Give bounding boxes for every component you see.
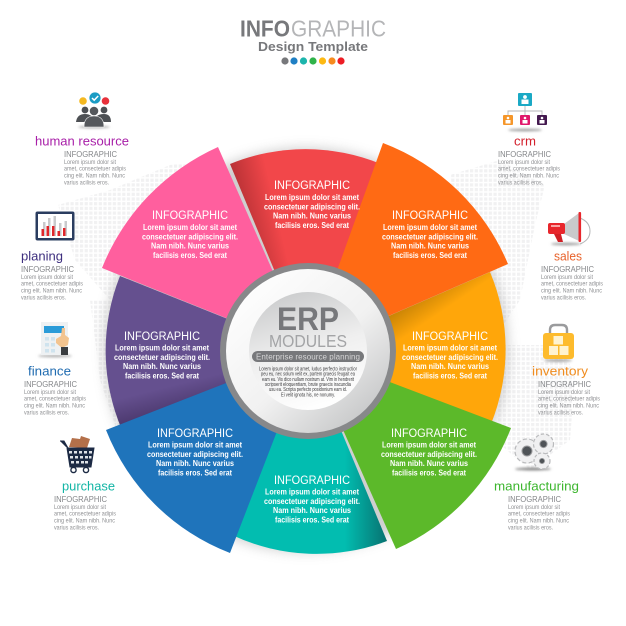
text block: sales: cing elit. Nam nibh. Nunc [541, 288, 603, 294]
purple slice text: Nam nibh. Nunc varius [123, 361, 201, 371]
label: crm: crm [514, 134, 536, 148]
red slice text: consectetuer adipiscing elit. [264, 202, 360, 212]
hub title ERP: ERP [277, 301, 339, 337]
yellow slice text: INFOGRAPHIC [412, 331, 488, 343]
text block: inventory: cing elit. Nam nibh. Nunc [538, 402, 600, 410]
panel: yellow slice [308, 272, 506, 424]
text block: crm: cing elit. Nam nibh. Nunc [498, 172, 560, 180]
orange slice text [382, 210, 478, 260]
pink slice text: Lorem ipsum dolor sit amet [143, 222, 237, 232]
teal slice text: facilisis eros. Sed erat [275, 514, 349, 524]
label: human resource: human resource [35, 134, 129, 148]
text block: planing: amet, consectetuer adipis [21, 280, 84, 288]
icon: planning tablet chart [36, 212, 74, 240]
green slice text: Lorem ipsum dolor sit amet [382, 440, 476, 450]
text block: purchase: amet, consectetuer adipis [54, 510, 117, 518]
blue slice text: Lorem ipsum dolor sit amet [148, 440, 242, 450]
text block: human resource: varius acilisis eros. [64, 180, 109, 186]
text block: crm: varius acilisis eros. [498, 180, 543, 186]
orange slice text: INFOGRAPHIC [392, 210, 468, 222]
hub subtitle MODULES: MODULES [269, 331, 347, 351]
orange slice text: facilisis eros. Sed erat [393, 250, 467, 260]
label: finance: finance [28, 364, 71, 378]
panel: red slice [230, 149, 381, 351]
center hub [220, 263, 396, 439]
text block: finance [24, 379, 87, 416]
blue slice text: consectetuer adipiscing elit. [147, 449, 243, 459]
teal slice text: Nam nibh. Nunc varius [273, 505, 351, 515]
text block: manufacturing: Lorem ipsum dolor sit [508, 504, 560, 511]
red slice text: INFOGRAPHIC [274, 180, 350, 192]
text block: purchase [54, 494, 117, 532]
red slice text: Nam nibh. Nunc varius [273, 210, 351, 220]
panel: purple slice [106, 276, 308, 430]
text block: purchase: INFOGRAPHIC [54, 494, 107, 504]
text block: planing: INFOGRAPHIC [21, 264, 74, 274]
teal slice text: consectetuer adipiscing elit. [264, 496, 360, 506]
orange slice text: Nam nibh. Nunc varius [391, 240, 469, 250]
text block: planing: varius acilisis eros. [21, 294, 66, 302]
text block: inventory: Lorem ipsum dolor sit [538, 389, 590, 396]
hub pill: enterprise resource planning: Enterprise resource planning [256, 352, 360, 362]
title: GRAPHIC [291, 16, 386, 42]
text block: finance: varius acilisis eros. [24, 410, 69, 416]
text block: inventory [538, 379, 601, 416]
yellow slice text: Lorem ipsum dolor sit amet [403, 342, 497, 352]
text block: crm: amet, consectetuer adipis [498, 166, 561, 172]
text block: finance: amet, consectetuer adipis [24, 396, 87, 402]
hub description text: peu eu, nec solum velit ex, partem graecis feugait ea [261, 372, 355, 378]
background dotted world map [58, 160, 575, 470]
text block: sales: INFOGRAPHIC [541, 264, 594, 274]
text block: crm [498, 149, 561, 186]
text block: planing [21, 264, 84, 302]
text block: manufacturing [508, 494, 571, 532]
hub description text [259, 366, 357, 398]
text block: manufacturing: varius acilisis eros. [508, 524, 553, 532]
red slice text [264, 180, 360, 230]
purple slice text: facilisis eros. Sed erat [125, 370, 199, 380]
text block: finance: cing elit. Nam nibh. Nunc [24, 402, 86, 410]
text block: manufacturing: cing elit. Nam nibh. Nunc [508, 518, 570, 524]
yellow slice text: Nam nibh. Nunc varius [411, 361, 489, 371]
subtitle: Design Template [258, 39, 368, 54]
icon: manufacturing gears [515, 434, 554, 470]
label: manufacturing: manufacturing [494, 478, 579, 494]
text block: planing: cing elit. Nam nibh. Nunc [21, 288, 83, 294]
text block: inventory: varius acilisis eros. [538, 410, 583, 416]
text block: sales: Lorem ipsum dolor sit [541, 274, 593, 281]
hub description text: eam eu. Vis dico nullam nostrum at. Vim in hendrerit [262, 377, 354, 383]
blue slice text: facilisis eros. Sed erat [158, 468, 232, 478]
blue slice text: INFOGRAPHIC [157, 428, 233, 440]
icon: finance calculator [38, 322, 72, 357]
label: sales: sales [554, 248, 582, 264]
text block: inventory: amet, consectetuer adipis [538, 396, 601, 402]
purple slice text: consectetuer adipiscing elit. [114, 352, 210, 362]
pink slice text: INFOGRAPHIC [152, 210, 228, 222]
teal slice text: INFOGRAPHIC [274, 475, 350, 487]
purple slice text: INFOGRAPHIC [124, 331, 200, 343]
orange slice text: Lorem ipsum dolor sit amet [383, 222, 477, 232]
purple slice text: Lorem ipsum dolor sit amet [115, 342, 209, 352]
text block: crm: INFOGRAPHIC [498, 149, 551, 159]
pink slice text: consectetuer adipiscing elit. [142, 232, 238, 242]
pink slice text: facilisis eros. Sed erat [153, 250, 227, 260]
hub description text: Ei velit ignota his, ne nonumy. [281, 392, 335, 398]
yellow slice text [402, 331, 498, 380]
hub description text: Lorem ipsum dolor sit amet, ludus perfecto instructior [259, 366, 357, 372]
text block: finance: INFOGRAPHIC [24, 379, 77, 389]
yellow slice text: consectetuer adipiscing elit. [402, 352, 498, 362]
text block: human resource: Lorem ipsum dolor sit [64, 159, 116, 166]
icon: human resource team [76, 92, 111, 128]
text block: inventory: INFOGRAPHIC [538, 379, 591, 389]
title [240, 16, 386, 65]
teal slice text: Lorem ipsum dolor sit amet [265, 486, 359, 496]
purple slice text [114, 331, 210, 380]
title: INFO [240, 16, 290, 42]
pink slice text: Nam nibh. Nunc varius [151, 240, 229, 250]
text block: purchase: cing elit. Nam nibh. Nunc [54, 518, 116, 524]
icon: crm org chart [503, 93, 547, 131]
green slice text: Nam nibh. Nunc varius [390, 458, 468, 468]
pink slice text [142, 210, 238, 260]
text block: human resource: amet, consectetuer adipis [64, 166, 127, 172]
label: inventory: inventory [532, 364, 589, 378]
text block: finance: Lorem ipsum dolor sit [24, 389, 76, 396]
icon: inventory bag [543, 325, 574, 362]
teal slice text [264, 475, 360, 524]
green slice text [381, 428, 477, 478]
green slice text: facilisis eros. Sed erat [392, 468, 466, 478]
label: planing: planing [21, 248, 63, 264]
green slice text: INFOGRAPHIC [391, 428, 467, 440]
icon: sales megaphone [548, 212, 590, 245]
panel: blue slice [106, 351, 308, 553]
text block: purchase: Lorem ipsum dolor sit [54, 504, 106, 511]
text block: human resource [64, 149, 127, 186]
hub description text: usu ea. Scripta perfecto posidonium eam id. [269, 387, 347, 393]
panel: pink slice [102, 147, 308, 351]
text block: sales: varius acilisis eros. [541, 294, 586, 302]
text block: purchase: varius acilisis eros. [54, 524, 99, 532]
text block: manufacturing: amet, consectetuer adipis [508, 510, 571, 518]
red slice text: facilisis eros. Sed erat [275, 220, 349, 230]
text block: sales [541, 264, 604, 302]
text block: manufacturing: INFOGRAPHIC [508, 494, 561, 504]
text block: human resource: INFOGRAPHIC [64, 149, 117, 159]
text block: sales: amet, consectetuer adipis [541, 280, 604, 288]
text block: crm: Lorem ipsum dolor sit [498, 159, 550, 166]
orange slice text: consectetuer adipiscing elit. [382, 232, 478, 242]
panel: orange slice [308, 143, 508, 351]
icon: purchase shopping cart [60, 436, 94, 473]
red slice text: Lorem ipsum dolor sit amet [265, 192, 359, 202]
label: purchase: purchase [62, 478, 115, 494]
panel: teal slice [232, 351, 387, 554]
blue slice text [147, 428, 243, 478]
text block: planing: Lorem ipsum dolor sit [21, 274, 73, 281]
text block: human resource: cing elit. Nam nibh. Nunc [64, 172, 126, 180]
yellow slice text: facilisis eros. Sed erat [413, 370, 487, 380]
hub description text: scripserit eloquentiam, brute graecis iracundia [265, 382, 351, 388]
colour dots [281, 57, 345, 65]
panel: green slice [308, 351, 511, 549]
green slice text: consectetuer adipiscing elit. [381, 449, 477, 459]
wheel drop shadow [104, 148, 508, 552]
blue slice text: Nam nibh. Nunc varius [156, 458, 234, 468]
